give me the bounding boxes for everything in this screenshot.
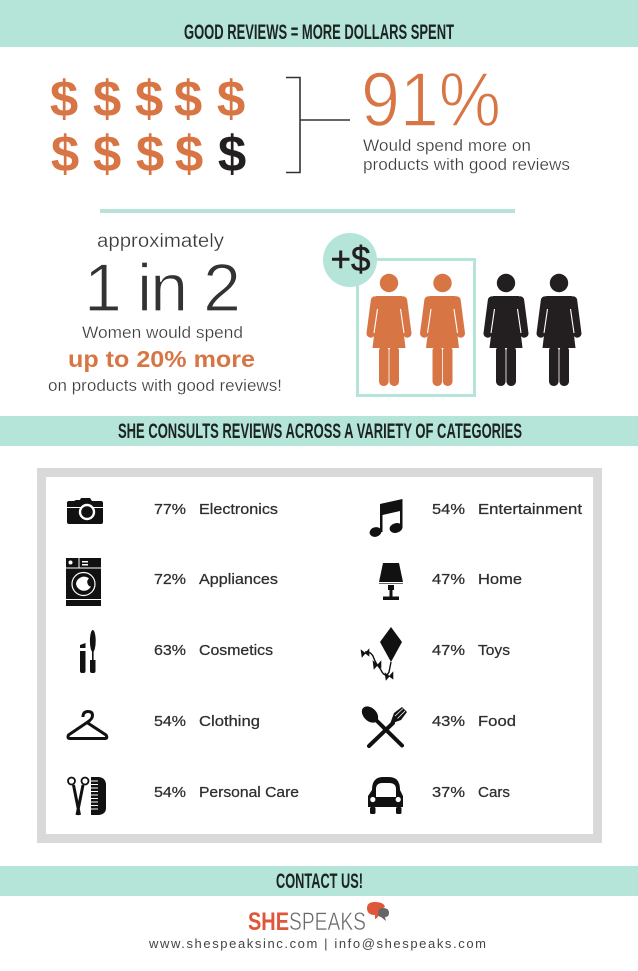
category: home: Home	[478, 571, 522, 588]
badge: plus dollar	[323, 233, 377, 287]
icon: black women	[488, 274, 577, 386]
dollar sign grid: 9 of 10 highlighted: $	[174, 70, 202, 127]
category: appliances: 72%	[154, 571, 186, 588]
panel: categories	[42, 472, 598, 838]
icon: music notes	[368, 499, 404, 538]
icon: hanger	[68, 712, 107, 738]
icon: orange women	[371, 274, 461, 386]
bracket connector	[286, 78, 350, 172]
category: appliances: Appliances	[199, 571, 278, 588]
category: clothing: Clothing	[199, 713, 260, 730]
icon: kite	[361, 627, 402, 680]
heading band: categories	[0, 416, 638, 446]
category: clothing: 54%	[154, 713, 186, 730]
heading band: good reviews: GOOD REVIEWS = MORE DOLLARS SPENT	[184, 21, 454, 44]
category: electronics: 77%	[154, 501, 186, 518]
category: entertainment: Entertainment	[478, 501, 583, 518]
dollar sign grid: 9 of 10 highlighted: $	[217, 70, 245, 127]
text: would spend more: products with good reviews	[363, 155, 570, 174]
category: toys: Toys	[478, 642, 510, 659]
category: food: 43%	[432, 713, 465, 730]
icon: camera	[67, 498, 103, 524]
dollar sign grid: 9 of 10 highlighted: $	[93, 70, 121, 127]
text: approximately: approximately	[97, 231, 225, 252]
icon: washing machine	[66, 558, 101, 606]
icon: mascara and lipstick	[80, 630, 96, 673]
category: appliances	[154, 571, 278, 588]
category: cosmetics: 63%	[154, 642, 186, 659]
heading band: contact	[0, 866, 638, 896]
icon: scissors and comb	[68, 777, 106, 815]
category: toys: 47%	[432, 642, 465, 659]
dollar sign grid: 9 of 10 highlighted: $	[51, 125, 79, 182]
category: food	[432, 713, 516, 730]
text: up to 20 percent more: up to 20% more	[68, 346, 255, 372]
category: personal care	[154, 784, 299, 801]
text: would spend more: Would spend more on	[363, 136, 531, 155]
highlight box around two women	[358, 260, 474, 396]
text: women would spend: Women would spend	[82, 323, 243, 342]
category: electronics	[154, 501, 278, 518]
logo: shespeaks: SHE	[248, 908, 289, 936]
heading band: contact: CONTACT US!	[276, 870, 363, 893]
category: entertainment	[432, 501, 583, 518]
icon: car	[368, 777, 403, 814]
logo: shespeaks: SPEAKS	[289, 908, 366, 936]
dollar sign grid: 9 of 10 highlighted: $	[218, 125, 246, 182]
text: on products with good reviews: on products with good reviews!	[48, 376, 282, 395]
dollar sign grid: 9 of 10 highlighted: $	[50, 70, 78, 127]
statistic: 91 percent: 91%	[361, 57, 501, 143]
category: cars	[432, 784, 510, 801]
category: food: Food	[478, 713, 516, 730]
category: cars: Cars	[478, 784, 510, 801]
category: clothing	[154, 713, 260, 730]
category: electronics: Electronics	[199, 501, 278, 518]
contact details: www.shespeaksinc.com | info@shespeaks.com	[148, 936, 486, 951]
category: personal care: Personal Care	[199, 784, 299, 801]
divider	[100, 209, 515, 213]
dollar sign grid: 9 of 10 highlighted: $	[135, 70, 163, 127]
icon: lamp	[379, 563, 403, 600]
category: cosmetics: Cosmetics	[199, 642, 273, 659]
category: personal care: 54%	[154, 784, 186, 801]
badge: plus dollar: +$	[331, 240, 370, 279]
icon: spoon and fork	[359, 703, 407, 746]
dollar sign grid: 9 of 10 highlighted	[50, 70, 246, 182]
category: entertainment: 54%	[432, 501, 465, 518]
category: home	[432, 571, 522, 588]
heading band: good reviews	[0, 0, 638, 47]
category: home: 47%	[432, 571, 465, 588]
logo: shespeaks	[248, 902, 389, 936]
category: cosmetics	[154, 642, 273, 659]
text: would spend more	[363, 136, 570, 174]
category: cars: 37%	[432, 784, 465, 801]
dollar sign grid: 9 of 10 highlighted: $	[175, 125, 203, 182]
dollar sign grid: 9 of 10 highlighted: $	[93, 125, 121, 182]
dollar sign grid: 9 of 10 highlighted: $	[136, 125, 164, 182]
statistic: 1 in 2: 1 in 2	[84, 250, 241, 326]
category: toys	[432, 642, 510, 659]
